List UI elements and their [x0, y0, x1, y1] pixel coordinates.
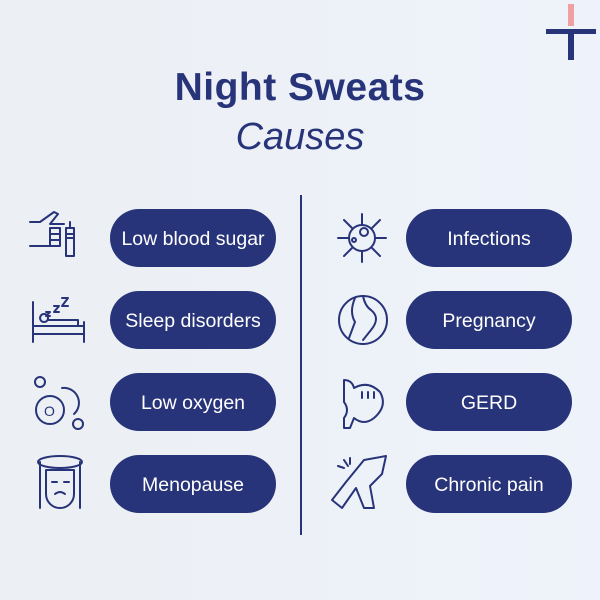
- pill: GERD: [406, 373, 572, 431]
- pill: Low blood sugar: [110, 209, 276, 267]
- divider: [300, 195, 302, 535]
- icon: knee pain: [331, 455, 387, 509]
- icon: hand glucose: [29, 211, 75, 257]
- pill: Low blood sugar: Low blood sugar: [121, 228, 265, 250]
- pill: Low oxygen: [110, 373, 276, 431]
- title: Night Sweats: [175, 66, 425, 109]
- icon: pregnancy: [338, 295, 388, 345]
- subtitle: Causes: [236, 116, 364, 158]
- pill: Low oxygen: Low oxygen: [141, 392, 245, 414]
- icon: sleep: [32, 297, 85, 343]
- icon: menopause face: [37, 455, 83, 509]
- pill: Menopause: [110, 455, 276, 513]
- icon: stomach: [343, 379, 384, 429]
- pill: Sleep disorders: Sleep disorders: [125, 310, 261, 332]
- pill: Pregnancy: [406, 291, 572, 349]
- icon: oxygen: O: [44, 403, 55, 419]
- pill: Infections: [406, 209, 572, 267]
- pill: Chronic pain: Chronic pain: [434, 474, 544, 496]
- logo: [546, 4, 596, 60]
- pill: Infections: Infections: [447, 228, 531, 250]
- pill: Menopause: Menopause: [142, 474, 244, 496]
- icon: oxygen: [34, 376, 84, 430]
- pill: Pregnancy: Pregnancy: [442, 310, 536, 332]
- pill: Chronic pain: [406, 455, 572, 513]
- icon: virus: [337, 213, 387, 263]
- pill: GERD: GERD: [461, 392, 517, 414]
- pill: Sleep disorders: [110, 291, 276, 349]
